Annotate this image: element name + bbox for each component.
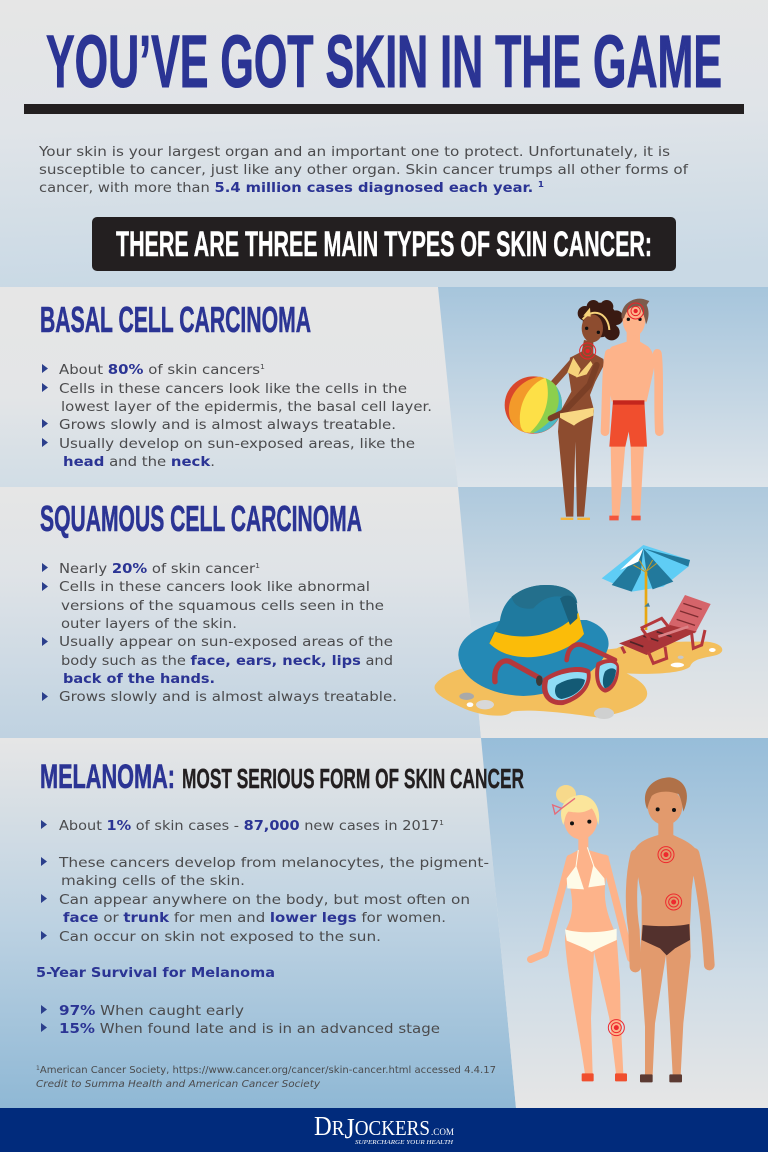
- bullet list: melanoma: [41, 818, 489, 945]
- bullet list: basal: About 80% of skin cancers: [59, 362, 249, 378]
- intro text block: cancer, with more than 5.4 million cases diagnosed each year.: [39, 180, 507, 196]
- bullet list: melanoma: Can occur on skin not exposed to the sun.: [59, 929, 381, 945]
- bullet list: melanoma: face or trunk for men and lower legs for women.: [63, 910, 446, 926]
- sunglasses: [495, 644, 619, 705]
- panel: basal cell carcinoma: [0, 287, 768, 487]
- target: forehead spot: [628, 303, 644, 319]
- bullet list: basal: [42, 362, 432, 470]
- beach ball: [505, 376, 562, 434]
- hat: [458, 585, 609, 696]
- bullet list: melanoma: 1: [439, 819, 444, 827]
- man: red shorts: [605, 299, 659, 520]
- bullet list: basal: Grows slowly and is almost always treatable.: [59, 417, 396, 433]
- footnote: 1: [36, 1065, 40, 1072]
- target: trunk spot: [666, 894, 682, 910]
- bullet list: squamous: Cells in these cancers look like abnormal: [59, 579, 370, 595]
- bullet list: squamous: versions of the squamous cells seen in the: [61, 598, 384, 614]
- man: brown briefs: [631, 777, 709, 1082]
- woman: dark hair, yellow bikini: [553, 361, 573, 384]
- heading: melanoma: [40, 758, 524, 796]
- intro text block: Your skin is your largest organ and an important one to protect. Unfortunately, it is: [38, 144, 670, 160]
- survival stats: [41, 1003, 440, 1037]
- panel: melanoma: [0, 738, 768, 1108]
- title rule: [24, 104, 744, 114]
- illustration: couple with beach ball: [505, 299, 659, 520]
- heading: melanoma: MELANOMA:: [40, 758, 175, 796]
- woman: body: [551, 300, 623, 520]
- bullet list: squamous: [42, 561, 397, 705]
- logo: DrJockers: [314, 1111, 454, 1146]
- bullet list: basal: head and the neck .: [63, 454, 215, 470]
- survival stats: 15% When found late and is in an advanced stage: [59, 1021, 440, 1037]
- target: lower leg spot: [608, 1020, 624, 1036]
- illustration: couple with marked melanoma sites: [531, 777, 709, 1082]
- intro text block: susceptible to cancer, just like any other organ. Skin cancer trumps all other forms of: [39, 162, 689, 178]
- bullet list: melanoma: Can appear anywhere on the body, but most often on: [59, 892, 470, 908]
- bullet list: squamous: outer layers of the skin.: [61, 616, 237, 632]
- logo: DrJockers: DR: [314, 1111, 346, 1141]
- umbrella: [602, 545, 690, 630]
- heading: squamous cell carcinoma: SQUAMOUS CELL CARCINOMA: [40, 498, 362, 539]
- bullet list: melanoma: About 1% of skin cases - 87,000 new cases in 2017: [59, 818, 429, 834]
- bullet list: basal: lowest layer of the epidermis, the basal cell layer.: [61, 399, 432, 415]
- bullet list: squamous: Nearly 20% of skin cancer: [59, 561, 246, 577]
- bullet list: melanoma: These cancers develop from melanocytes, the pigment-: [58, 855, 489, 871]
- back arm: [553, 361, 573, 384]
- heading: melanoma: MOST SERIOUS FORM OF SKIN CANCER: [182, 763, 524, 794]
- bullet list: basal: Usually develop on sun-exposed areas, like the: [59, 436, 415, 452]
- bullet list: squamous: body such as the face, ears, neck, lips and: [61, 653, 393, 669]
- bullet list: squamous: back of the hands.: [63, 671, 215, 687]
- target: chest spot: [658, 847, 674, 863]
- woman: blonde, white bikini: [531, 785, 638, 1081]
- stones: [459, 648, 716, 719]
- subheading: five-year survival: 5-Year Survival for Melanoma: [36, 965, 275, 981]
- intro text block: [38, 144, 689, 196]
- bullet list: squamous: Usually appear on sun-exposed areas of the: [59, 634, 393, 650]
- bullet list: basal: Cells in these cancers look like the cells in the: [59, 381, 407, 397]
- bullet list: melanoma: making cells of the skin.: [61, 873, 245, 889]
- heading: basal cell carcinoma: BASAL CELL CARCINOMA: [40, 299, 311, 340]
- page header background: [0, 0, 768, 288]
- intro text block: 1: [538, 180, 544, 189]
- bullet list: squamous: 1: [255, 562, 260, 570]
- logo: DrJockers: OCKERS: [355, 1116, 430, 1140]
- target: neck spot: [580, 343, 596, 359]
- footnote: [36, 1065, 496, 1090]
- footnote: American Cancer Society, https://www.cancer.org/cancer/skin-cancer.html accessed 4.4.17: [40, 1065, 496, 1076]
- survival stats: 97% When caught early: [59, 1003, 244, 1019]
- sand: [435, 642, 722, 717]
- bullet list: basal: 1: [260, 363, 265, 371]
- banner: three main types: [92, 217, 676, 271]
- logo: DrJockers: .COM: [431, 1127, 454, 1137]
- illustration: sun hat, sunglasses, umbrella and lounge chair: [435, 545, 722, 719]
- logo: DrJockers: SUPERCHARGE YOUR HEALTH: [355, 1139, 453, 1146]
- footer bar: [0, 1108, 768, 1152]
- bullet list: squamous: Grows slowly and is almost always treatable.: [59, 689, 397, 705]
- lounge chair: [619, 595, 711, 663]
- footnote: Credit to Summa Health and American Cancer Society: [36, 1079, 321, 1090]
- panel: squamous cell carcinoma: [0, 487, 768, 738]
- logo: DrJockers: J: [344, 1113, 355, 1145]
